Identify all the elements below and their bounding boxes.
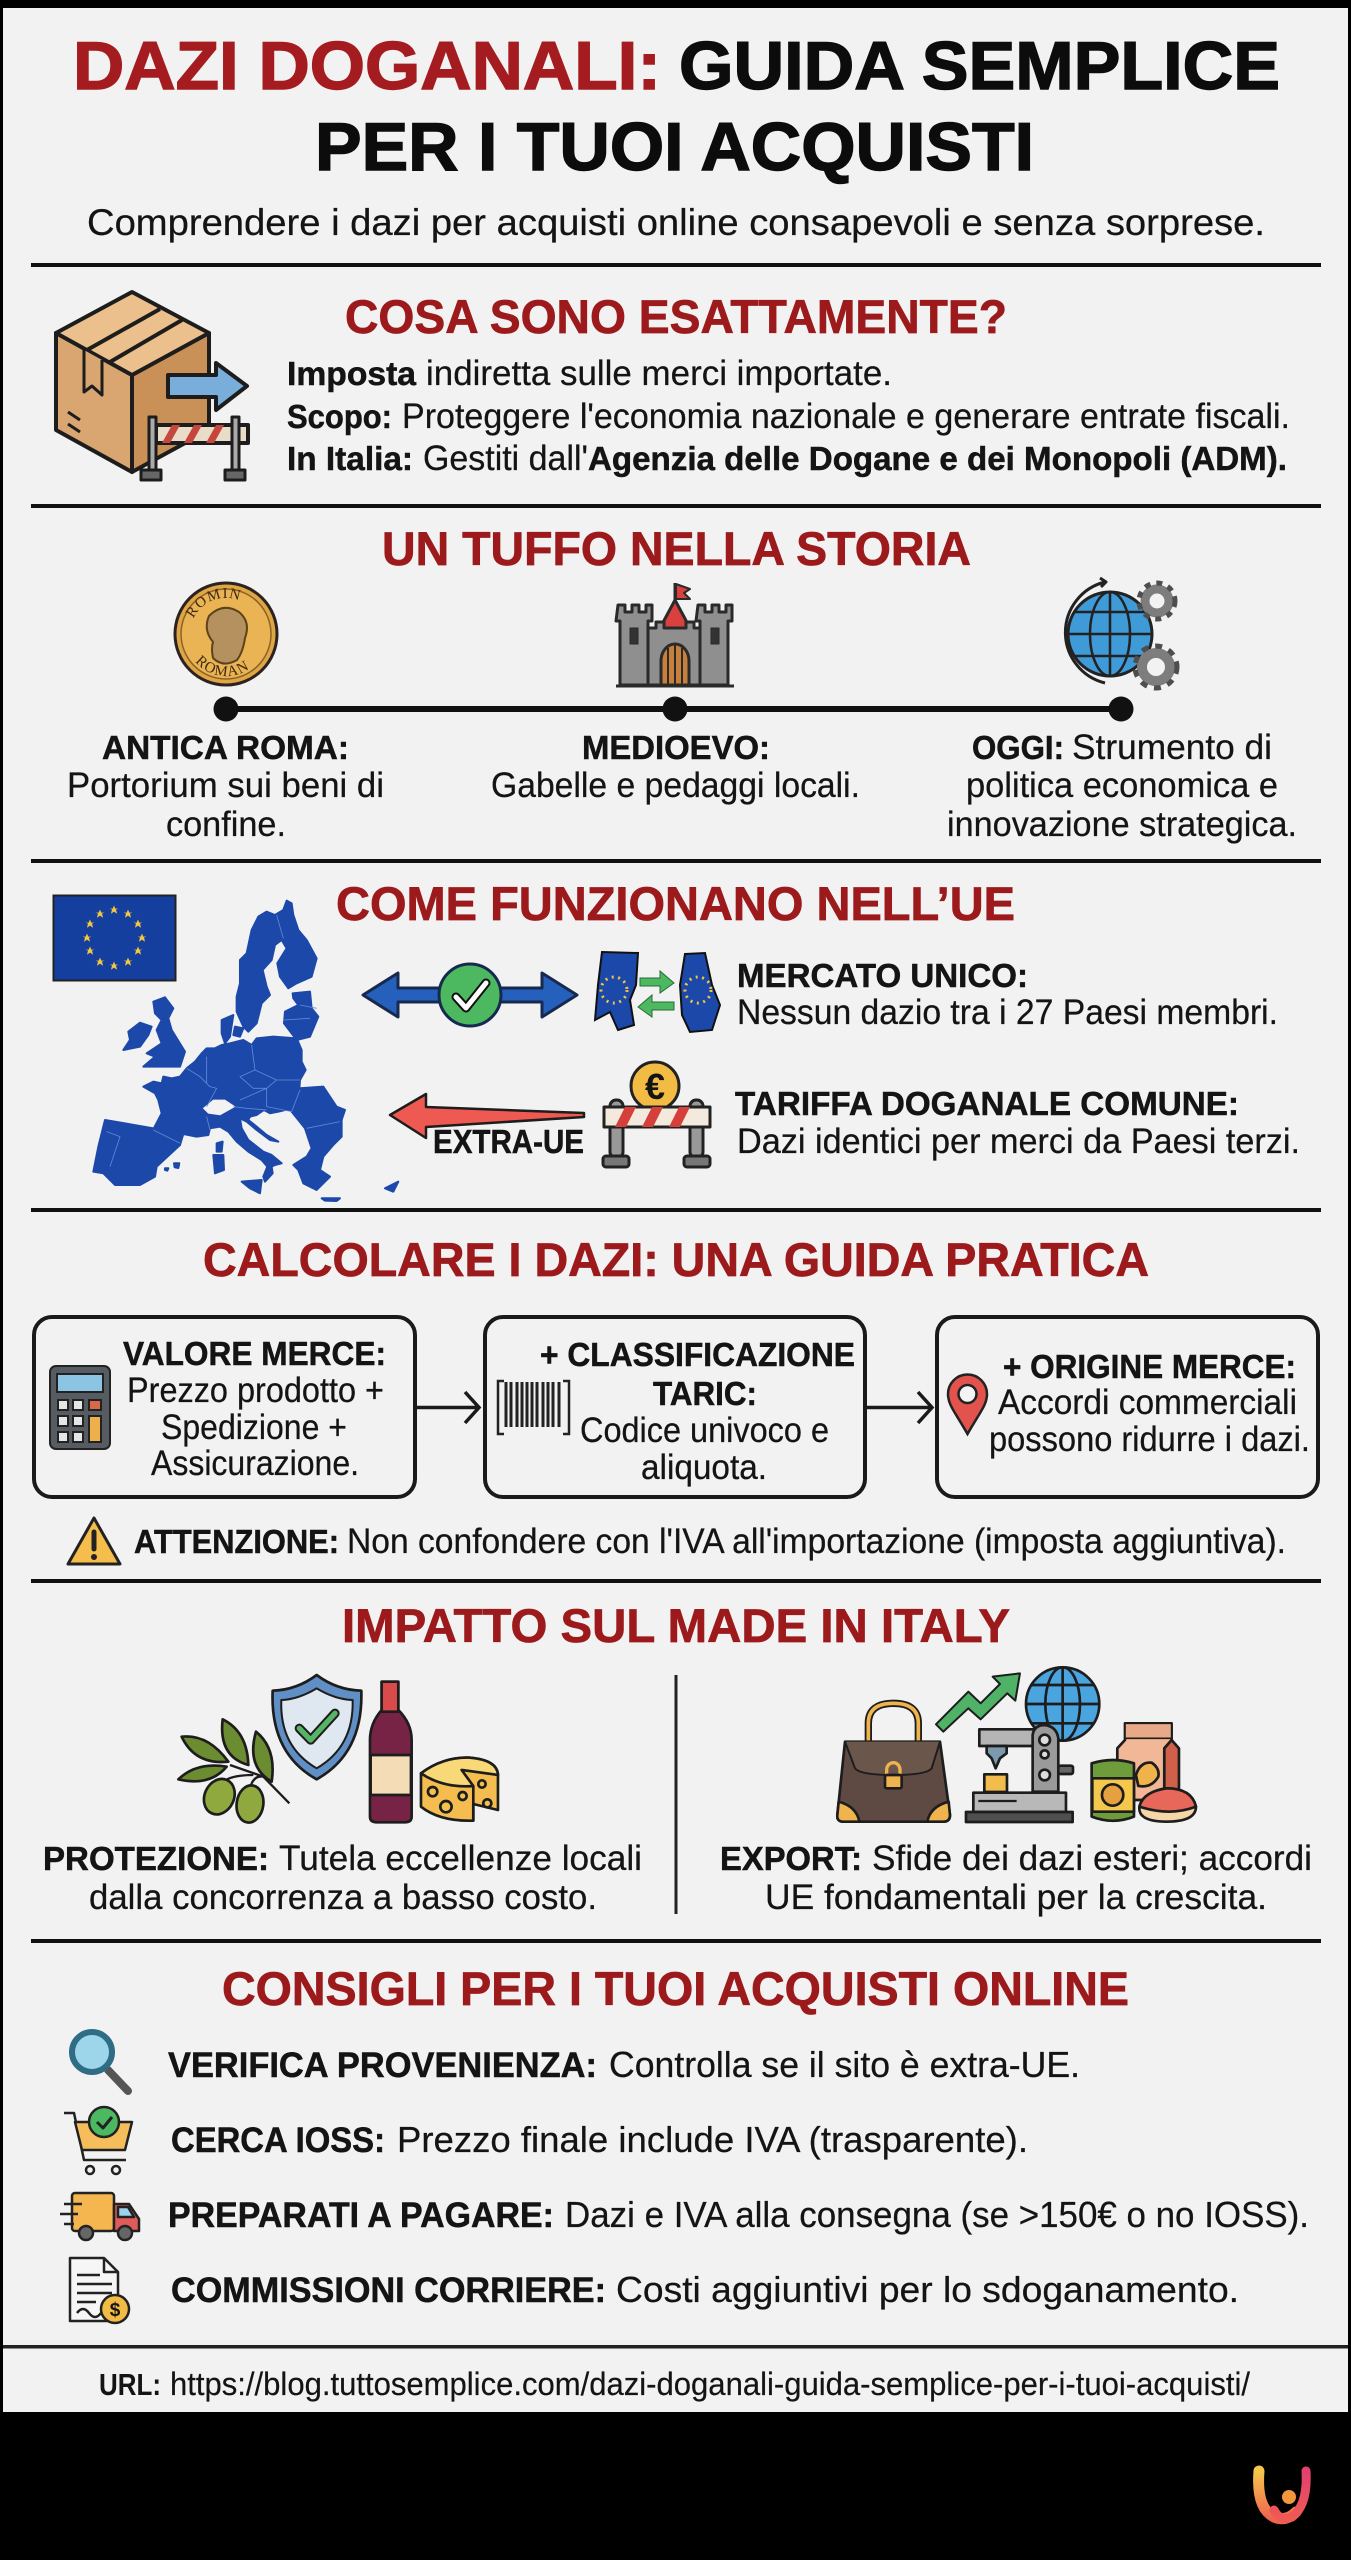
- footer: url: https://blog.tuttosemplice.com/dazi-doganali-guida-semplice-per-i-tuoi-acquisti/: [170, 2366, 1250, 2402]
- icon: magnifier: [72, 2032, 128, 2091]
- text: export: [720, 1839, 1312, 1917]
- text: mercato unico: MERCATO UNICO:: [737, 957, 1028, 994]
- text: definition: Gestiti dall': [423, 439, 588, 478]
- text: protezione: PROTEZIONE:: [43, 1840, 269, 1877]
- text: oggi: [947, 728, 1297, 844]
- text: origine: [989, 1348, 1310, 1459]
- text: classificazione: TARIC:: [653, 1375, 757, 1412]
- text: valore merce: VALORE MERCE:: [123, 1335, 386, 1372]
- title: [73, 28, 1280, 185]
- tip: commissioni corriere: [70, 2258, 1239, 2323]
- heading: storia: UN TUFFO NELLA STORIA: [382, 522, 971, 575]
- text: export: EXPORT:: [720, 1840, 862, 1877]
- text: definition: [287, 354, 1290, 478]
- text: protezione: [43, 1839, 642, 1917]
- panel: made in italy: [43, 1599, 1312, 1917]
- icons: export group: [837, 1667, 1196, 1822]
- panel: unione europea: [54, 877, 1300, 1201]
- heading: UE: COME FUNZIONANO NELL’UE: [336, 877, 1015, 930]
- icon: truck: [60, 2193, 139, 2240]
- icon: handbag: [837, 1703, 950, 1822]
- card: classificazione taric: [485, 1317, 865, 1497]
- icon: food: [1092, 1723, 1196, 1822]
- text: mercato unico: [737, 957, 1278, 1032]
- text: definition: Agenzia delle Dogane e dei Monopoli (ADM).: [588, 440, 1287, 477]
- text: origine: Accordi commerciali: [998, 1383, 1297, 1422]
- text: classificazione: + CLASSIFICAZIONE: [540, 1336, 855, 1373]
- title: GUIDA SEMPLICE: [679, 28, 1280, 104]
- icon: wine bottle: [370, 1682, 412, 1822]
- tip: preparati a pagare: Dazi e IVA alla consegna (se >150€ o no IOSS).: [565, 2194, 1309, 2235]
- text: tariffa doganale: TARIFFA DOGANALE COMUNE:: [735, 1085, 1239, 1122]
- icon: growth arrow: [936, 1673, 1020, 1732]
- text: oggi: OGGI:: [972, 729, 1064, 766]
- heading: made in italy: IMPATTO SUL MADE IN ITALY: [342, 1599, 1010, 1652]
- tip: verifica provenienza: Controlla se il sito è extra-UE.: [609, 2044, 1080, 2085]
- icon: calculator: [50, 1366, 110, 1449]
- tip: verifica provenienza: [72, 2032, 1080, 2091]
- icon: olive branch: [178, 1719, 289, 1824]
- icon: EU flag: [54, 896, 176, 980]
- text: classificazione: aliquota.: [641, 1448, 767, 1487]
- text: valore merce: Assicurazione.: [151, 1444, 359, 1483]
- text: tariffa doganale: Dazi identici per merci da Paesi terzi.: [737, 1122, 1300, 1161]
- icon: warning: [68, 1518, 120, 1564]
- icon: cart: [64, 2107, 132, 2174]
- text: origine: + ORIGINE MERCE:: [1003, 1348, 1296, 1385]
- icon: machine: [966, 1725, 1073, 1822]
- heading: cosa sono: COSA SONO ESATTAMENTE?: [345, 290, 1007, 343]
- text: valore merce: [123, 1335, 386, 1483]
- icon: two countries with exchange arrows: [595, 952, 720, 1032]
- callout: attenzione: ATTENZIONE:: [134, 1523, 339, 1560]
- text: oggi: Strumento di: [1072, 728, 1272, 767]
- text: protezione: Tutela eccellenze locali: [279, 1839, 642, 1878]
- icon: box with arrow and barrier: [56, 292, 248, 480]
- text: medioevo: MEDIOEVO:: [582, 729, 770, 766]
- callout: attenzione: [68, 1518, 1286, 1564]
- icon: red arrow: [390, 1094, 584, 1138]
- icon: barrier with euro coin: [603, 1062, 710, 1167]
- icon: location pin: [948, 1374, 987, 1434]
- icons: protezione group: [178, 1675, 498, 1824]
- title: PER I TUOI ACQUISTI: [315, 109, 1034, 185]
- label: extra-ue: EXTRA-UE: [433, 1123, 584, 1160]
- tip: verifica provenienza: VERIFICA PROVENIENZA:: [168, 2046, 597, 2085]
- icon: cheese: [421, 1758, 498, 1821]
- callout: attenzione: Non confondere con l'IVA all'importazione (imposta aggiuntiva).: [347, 1522, 1286, 1561]
- text: medioevo: [491, 729, 860, 805]
- panel: storia: [67, 522, 1297, 844]
- tip: cerca ioss: CERCA IOSS:: [171, 2121, 385, 2160]
- text: tariffa doganale: [735, 1085, 1300, 1161]
- arrow: step 2 to 3: [866, 1392, 932, 1423]
- text: antica roma: ANTICA ROMA:: [102, 729, 349, 766]
- title: DAZI DOGANALI:: [73, 28, 661, 104]
- text: definition: In Italia:: [287, 440, 413, 477]
- tip: preparati a pagare: [60, 2193, 1309, 2240]
- tip: cerca ioss: [64, 2107, 1028, 2174]
- text: export: Sfide dei dazi esteri; accordi: [872, 1839, 1312, 1878]
- map: Europe: [93, 901, 398, 1201]
- tip: cerca ioss: Prezzo finale include IVA (trasparente).: [397, 2119, 1028, 2160]
- heading: calcolo: CALCOLARE I DAZI: UNA GUIDA PRATICA: [203, 1233, 1149, 1286]
- text: protezione: dalla concorrenza a basso costo.: [89, 1878, 597, 1917]
- icon: roman coin: ROMAN: [195, 654, 248, 676]
- tip: preparati a pagare: PREPARATI A PAGARE:: [168, 2196, 554, 2235]
- text: antica roma: [67, 729, 384, 844]
- icon: double arrow with check: [363, 964, 577, 1026]
- icon: document with coin: $: [110, 2300, 121, 2321]
- text: classificazione: [540, 1336, 855, 1487]
- panel: cosa sono esattamente: [56, 290, 1290, 480]
- icon: globe and gears: [1065, 578, 1177, 688]
- subtitle: Comprendere i dazi per acquisti online consapevoli e senza sorprese.: [87, 202, 1265, 243]
- panel: calcolo: [34, 1233, 1318, 1564]
- text: valore merce: Prezzo prodotto +: [127, 1371, 384, 1410]
- tip: commissioni corriere: Costi aggiuntivi per lo sdoganamento.: [616, 2269, 1239, 2310]
- tip: commissioni corriere: COMMISSIONI CORRIERE:: [171, 2271, 606, 2310]
- text: definition: Imposta: [287, 355, 417, 392]
- footer: url: URL:: [99, 2367, 161, 2402]
- text: origine: possono ridurre i dazi.: [989, 1420, 1310, 1459]
- text: oggi: innovazione strategica.: [947, 805, 1297, 844]
- text: export: UE fondamentali per la crescita.: [765, 1878, 1267, 1917]
- card: origine merce: [937, 1317, 1318, 1497]
- text: definition: Scopo:: [287, 398, 392, 435]
- text: mercato unico: Nessun dazio tra i 27 Paesi membri.: [737, 993, 1278, 1032]
- icon: document with coin: [70, 2258, 129, 2323]
- icon: roman coin: [174, 582, 278, 686]
- text: definition: Proteggere l'economia nazionale e generare entrate fiscali.: [402, 397, 1290, 436]
- card: valore merce: [34, 1317, 415, 1497]
- heading: consigli: CONSIGLI PER I TUOI ACQUISTI ONLINE: [222, 1962, 1129, 2015]
- text: antica roma: Portorium sui beni di: [67, 766, 384, 805]
- arrow: step 1 to 2: [416, 1392, 479, 1423]
- text: classificazione: Codice univoco e: [580, 1411, 829, 1450]
- text: oggi: politica economica e: [966, 766, 1278, 805]
- icon: shield: [273, 1675, 361, 1779]
- icon: castle: [616, 583, 734, 686]
- timeline: [214, 696, 1134, 722]
- icon: barrier with euro coin: €: [645, 1066, 665, 1107]
- text: valore merce: Spedizione +: [161, 1408, 347, 1447]
- text: antica roma: confine.: [166, 805, 286, 844]
- icon: globe: [1026, 1667, 1099, 1741]
- icon: roman coin: ROMIN: [185, 588, 242, 618]
- logo: [1259, 2471, 1306, 2519]
- text: medioevo: Gabelle e pedaggi locali.: [491, 766, 860, 805]
- icon: barcode: [498, 1381, 569, 1434]
- text: definition: indiretta sulle merci importate.: [426, 354, 892, 393]
- panel: consigli: [60, 1962, 1309, 2323]
